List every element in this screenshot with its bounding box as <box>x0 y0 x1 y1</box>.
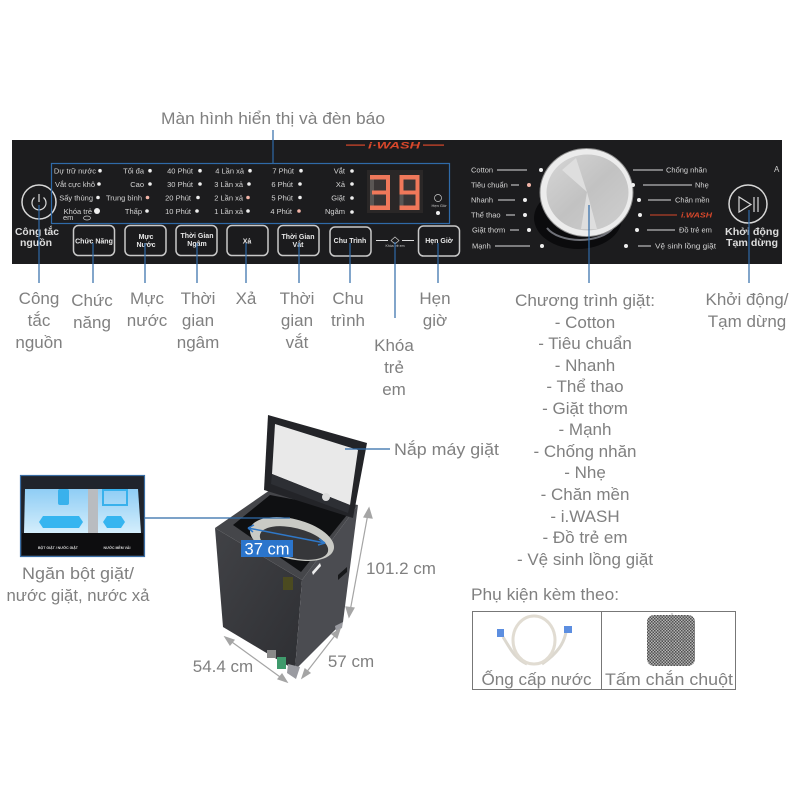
label: function <box>71 291 113 332</box>
indicator list: soak time: 20 Phút <box>165 194 192 202</box>
lid <box>264 415 367 518</box>
label: power: nguồn <box>15 333 63 352</box>
label: hose: Ống cấp nước <box>482 669 592 689</box>
label: spin time <box>280 289 314 352</box>
label: wash programs list <box>515 291 655 569</box>
dial labels right <box>624 166 717 250</box>
indicator list: rinse <box>214 166 252 216</box>
child lock mark <box>376 237 414 248</box>
indicator list: column 1: Dự trữ nước <box>54 166 96 176</box>
label: rinse: Xả <box>236 289 257 308</box>
label: cycle <box>331 289 365 330</box>
play pause button <box>725 185 779 249</box>
callout: lid: Nắp máy giặt <box>394 440 499 459</box>
indicator list: soak time: 40 Phút <box>167 166 194 176</box>
control panel <box>12 140 782 264</box>
drawer photo: BỘT GIẶT / NƯỚC GIẶT <box>38 545 79 550</box>
label: wash programs list: - Tiêu chuẩn <box>538 334 632 353</box>
label: wash programs list: - Cotton <box>555 313 615 332</box>
body <box>215 490 358 679</box>
label: wash programs list: - i.WASH <box>550 507 620 526</box>
label: child lock: em <box>382 380 406 399</box>
display bracket and leaders <box>39 130 749 318</box>
label: wash programs list: - Mạnh <box>559 420 611 439</box>
label: cycle: Chu <box>332 289 364 308</box>
indicator list: stages: Xả <box>336 180 346 189</box>
button: Hẹn giờ <box>418 226 460 256</box>
label: spin time: vắt <box>286 333 309 352</box>
button: Thời gian ngâm: Thời Gian <box>181 233 213 240</box>
label: child lock <box>374 336 414 399</box>
label: timer <box>419 289 451 330</box>
indicator list: water level: Cao <box>130 180 144 189</box>
label: width: 54.4 cm <box>193 657 253 676</box>
i.WASH logo: i·WASH <box>368 140 421 150</box>
timer indicator: Hẹn Giờ <box>431 203 447 208</box>
label: drawer: Ngăn bột giặt/ <box>22 564 134 583</box>
power button: nguồn <box>20 237 52 249</box>
arrow: depth <box>302 629 340 678</box>
dial labels left: Mạnh <box>472 242 491 250</box>
i.WASH logo <box>346 140 444 150</box>
indicator list: soak time <box>165 166 202 216</box>
button: Mực nước <box>125 226 166 256</box>
arrow: height <box>346 508 372 617</box>
label: timer: giờ <box>423 311 447 330</box>
button: Mực nước: Mực <box>139 234 154 241</box>
label: soak time: ngâm <box>177 333 219 352</box>
label: power <box>15 289 63 352</box>
button: Thời gian vắt: Thời Gian <box>282 234 314 241</box>
indicator list: rinse: 4 Lần xả <box>215 166 245 176</box>
indicator list: stages: Vắt <box>334 166 346 176</box>
label: drawer <box>6 564 150 605</box>
digit 3 <box>370 175 390 210</box>
label: start pause: Khởi động/ <box>706 290 789 309</box>
label: start pause <box>706 290 789 331</box>
label: wash programs list: Chương trình giặt: <box>515 291 655 310</box>
indicator list: water level: Trung bình <box>106 194 142 202</box>
indicator list: column 1 <box>54 166 102 222</box>
label: water level: nước <box>127 311 168 330</box>
power button <box>15 185 59 249</box>
button: Hẹn giờ: Hẹn Giờ <box>425 238 453 245</box>
dial labels left: Cotton <box>471 166 493 174</box>
indicator list: spin time: 4 Phút <box>270 207 293 216</box>
indicator list: stages: Ngâm <box>325 207 345 216</box>
drum <box>245 509 339 569</box>
indicator list: column 1: Khóa trẻ <box>64 207 92 216</box>
dial labels right: Vệ sinh lồng giặt <box>655 242 717 250</box>
arrow: width <box>225 637 287 682</box>
callout: drawer leader <box>145 517 290 519</box>
indicator list: spin time <box>270 166 303 216</box>
label: depth: 57 cm <box>328 652 374 671</box>
label: spin time: gian <box>281 311 313 330</box>
dial labels left: Nhanh <box>471 196 493 204</box>
button: Thời gian ngâm <box>176 226 217 256</box>
button: Mực nước: Nước <box>136 242 156 249</box>
indicator list: rinse: 1 Lần xả <box>214 207 244 216</box>
label: height: 101.2 cm <box>366 559 436 578</box>
dial labels right: i.WASH <box>681 212 713 220</box>
label: wash programs list: - Thể thao <box>546 377 624 396</box>
button: Thời gian vắt <box>278 226 319 256</box>
indicator list: water level <box>106 166 152 216</box>
timer indicator <box>431 194 447 215</box>
indicator list: water level: Thấp <box>125 207 142 216</box>
accessories table <box>472 611 736 690</box>
button: Chu trình <box>330 227 371 256</box>
label: child lock: Khóa <box>374 336 414 355</box>
label: wash programs list: - Giặt thơm <box>542 399 628 418</box>
button: Thời gian ngâm: Ngâm <box>187 241 207 248</box>
power button: Công tắc <box>15 225 59 238</box>
indicator list: spin time: 5 Phút <box>271 194 294 202</box>
indicator list: stages: Giặt <box>331 194 346 202</box>
label: wash programs list: - Vệ sinh lồng giặt <box>517 550 653 569</box>
label: power: Công <box>19 289 59 308</box>
digit 9 <box>400 175 420 210</box>
label: timer: Hẹn <box>419 289 451 308</box>
label: soak time: Thời <box>181 289 215 308</box>
button: Chức năng <box>74 226 114 256</box>
label: 37 cm: 37 cm <box>245 540 289 558</box>
indicator list: rinse: 3 Lần xả <box>214 180 244 189</box>
child lock mark: Khóa trẻ em <box>385 244 405 248</box>
label: function: năng <box>73 313 111 332</box>
dial labels left: Thể thao <box>471 210 501 220</box>
dial labels right: Nhẹ <box>695 180 709 190</box>
label: wash programs list: - Đồ trẻ em <box>542 528 628 547</box>
label: cycle: trình <box>331 311 365 330</box>
button: Thời gian vắt: Vắt <box>293 240 304 249</box>
heading: accessories: Phụ kiện kèm theo: <box>471 585 619 604</box>
indicator list: stages <box>325 166 354 216</box>
dial labels right: Chăn mền <box>675 196 710 204</box>
indicator list: spin time: 6 Phút <box>271 180 294 189</box>
arrow: drum diameter <box>248 525 325 545</box>
button: Xả: Xả <box>243 238 251 246</box>
icon: rodent mesh <box>647 613 695 666</box>
indicator list: water level: Tối đa <box>123 166 145 176</box>
dial labels left <box>471 166 544 250</box>
label: mesh: Tấm chắn chuột <box>605 670 733 689</box>
digital display <box>367 170 423 213</box>
indicator list: spin time: 7 Phút <box>272 166 295 176</box>
dial labels right: Chống nhăn <box>666 166 707 174</box>
label: function: Chức <box>71 291 113 310</box>
icon: water hose <box>497 616 572 664</box>
label: drawer: nước giặt, nước xả <box>6 586 150 605</box>
dial knob <box>534 148 633 249</box>
label: soak time: gian <box>182 311 214 330</box>
washing machine <box>215 415 367 679</box>
indicator list: soak time: 30 Phút <box>167 180 194 189</box>
label: child lock: trẻ <box>384 358 404 377</box>
indicator list: column 1: Vắt cực khô <box>55 180 95 189</box>
label: wash programs list: - Chăn mền <box>541 485 629 504</box>
play pause button: Khởi động <box>725 227 779 238</box>
label: wash programs list: - Nhanh <box>555 356 615 375</box>
dial labels left: Giặt thơm <box>472 226 505 234</box>
label: wash programs list: - Chống nhăn <box>533 442 637 461</box>
dial labels left: Tiêu chuẩn <box>471 180 508 190</box>
indicator list: rinse: 2 Lần xả <box>214 194 244 202</box>
button: Chức năng: Chức Năng <box>75 238 113 246</box>
button: Chu trình: Chu Trình <box>334 238 366 245</box>
play pause button: Tạm dừng <box>726 238 778 249</box>
drawer photo: NƯỚC MỀM VẢI <box>104 545 130 550</box>
label: wash programs list: - Nhẹ <box>564 463 606 482</box>
label: water level: Mực <box>130 289 165 308</box>
dial labels right: Đồ trẻ em <box>679 226 712 234</box>
button: Xả <box>227 226 268 256</box>
drawer photo <box>20 476 144 556</box>
clipped panel label: A <box>774 165 780 174</box>
label: display: Màn hình hiển thị và đèn báo <box>161 109 385 128</box>
label: spin time: Thời <box>280 289 314 308</box>
indicator list: column 1: Sấy thùng <box>59 194 93 202</box>
label: power: tắc <box>28 311 51 330</box>
indicator list: column 1: em <box>63 213 73 222</box>
label: soak time <box>177 289 219 352</box>
label: water level <box>127 289 168 330</box>
indicator list: soak time: 10 Phút <box>165 207 192 216</box>
label: start pause: Tạm dừng <box>708 312 786 331</box>
